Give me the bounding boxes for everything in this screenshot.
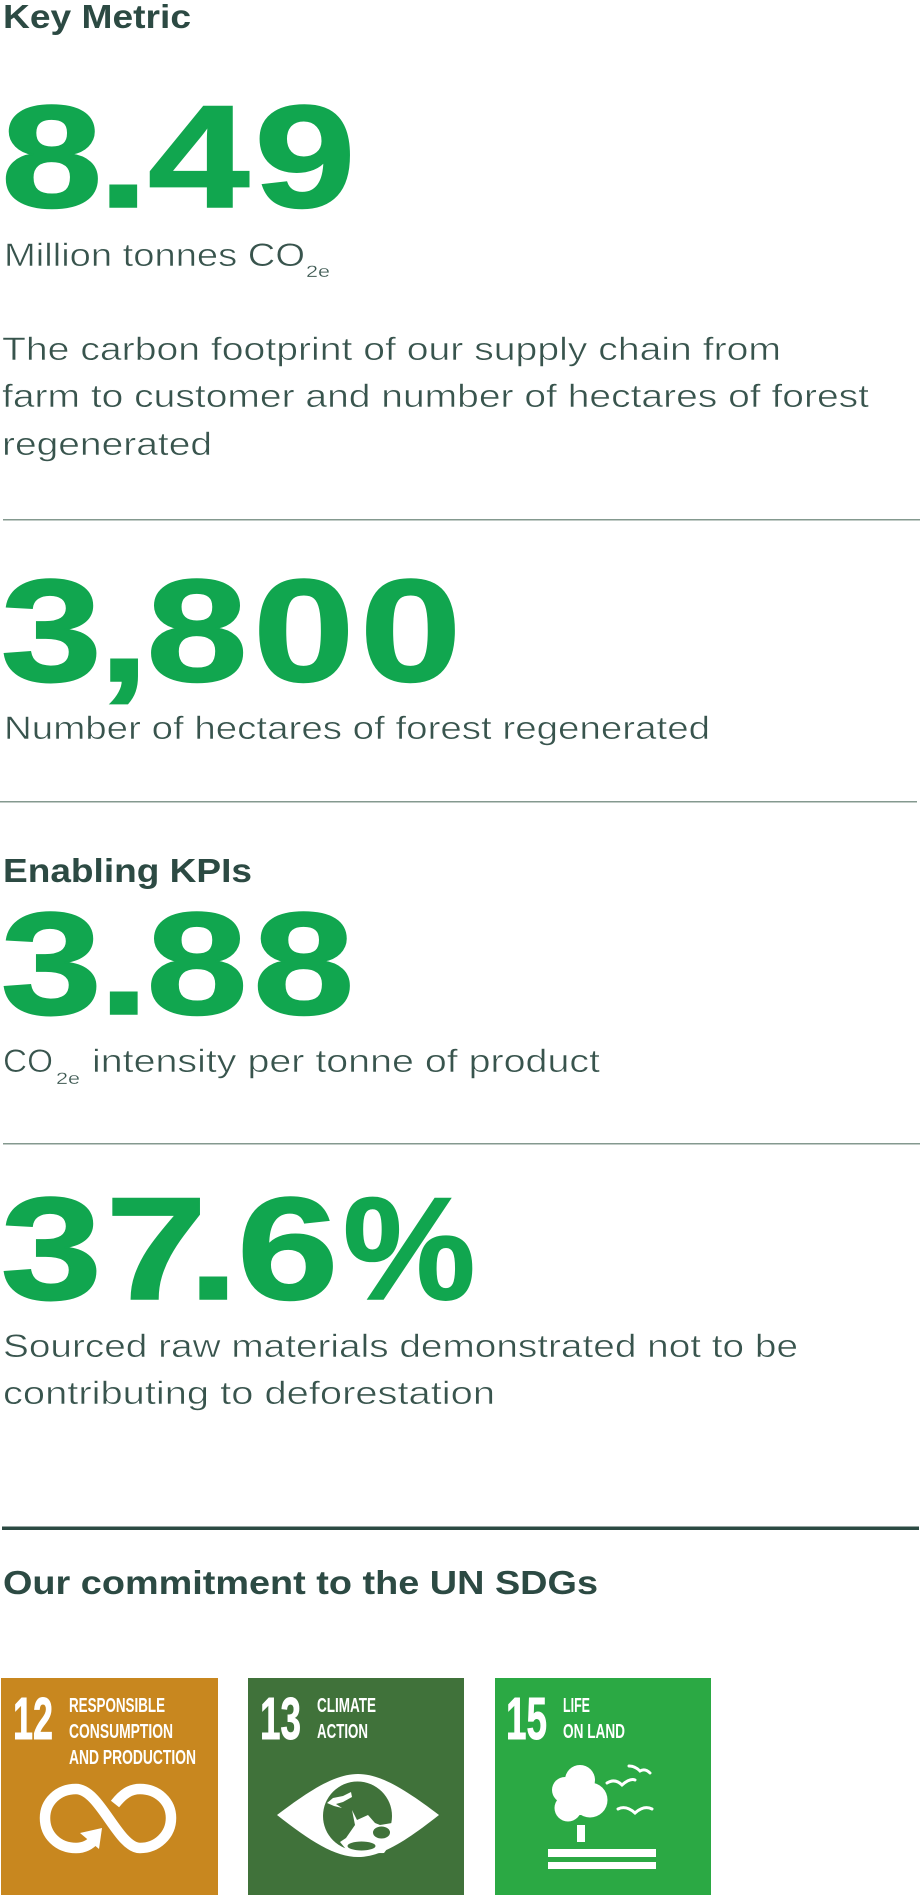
title: life on land: ON LAND	[563, 1721, 625, 1743]
number 12: 12	[13, 1686, 53, 1752]
metric: 3,800: 3,800	[0, 549, 461, 713]
text block: carbon footprint description: regenerated	[2, 426, 212, 462]
text block: sourced raw materials	[3, 1328, 798, 1411]
title: responsible consumption and production: RESPONSIBLE	[69, 1695, 165, 1717]
title: life on land: LIFE	[563, 1695, 590, 1717]
icon: tree, birds and land	[548, 1765, 656, 1869]
title: responsible consumption and production: CONSUMPTION	[69, 1721, 173, 1743]
text block: carbon footprint description	[2, 331, 869, 462]
text block: sourced raw materials: contributing to deforestation	[3, 1375, 495, 1411]
text block: sourced raw materials: Sourced raw materials demonstrated not to be	[3, 1328, 798, 1364]
label: CO2e intensity: CO	[3, 1043, 53, 1079]
heading: Enabling KPIs: Enabling KPIs	[3, 852, 252, 889]
title: life on land	[563, 1695, 625, 1743]
title: responsible consumption and production: AND PRODUCTION	[69, 1747, 196, 1769]
label: million tonnes: 2e	[306, 262, 330, 281]
title: climate action: CLIMATE	[317, 1695, 376, 1717]
icon: infinity loop with arrow	[45, 1789, 171, 1849]
label: million tonnes: Million tonnes CO	[4, 237, 305, 273]
panel: SDG 13 tile	[248, 1678, 464, 1895]
label: CO2e intensity: 2e	[56, 1069, 80, 1088]
metric: 37.6%: %	[343, 1168, 475, 1331]
label: hectares regenerated: Number of hectares of forest regenerated	[4, 710, 710, 746]
heading: UN SDGs commitment: Our commitment to the UN SDGs	[3, 1564, 598, 1601]
icon: eye with globe	[277, 1774, 439, 1857]
title: responsible consumption and production	[69, 1695, 196, 1769]
metric: 3.88: 3.88	[0, 882, 354, 1046]
title: climate action	[317, 1695, 376, 1743]
number 15: 15	[506, 1686, 547, 1752]
label: CO2e intensity	[3, 1043, 600, 1088]
metric: 37.6%: 37.6	[0, 1167, 338, 1331]
title: climate action: ACTION	[317, 1721, 368, 1743]
panel: SDG 15 tile	[495, 1678, 711, 1895]
label: million tonnes	[4, 237, 330, 281]
text block: carbon footprint description: The carbon footprint of our supply chain from	[2, 331, 781, 367]
label: CO2e intensity: intensity per tonne of product	[92, 1043, 600, 1079]
panel: SDG 12 tile	[1, 1678, 218, 1895]
number 13: 13	[260, 1686, 301, 1752]
metric: 8.49: 8.49	[1, 75, 356, 239]
text block: carbon footprint description: farm to customer and number of hectares of forest	[2, 378, 869, 414]
